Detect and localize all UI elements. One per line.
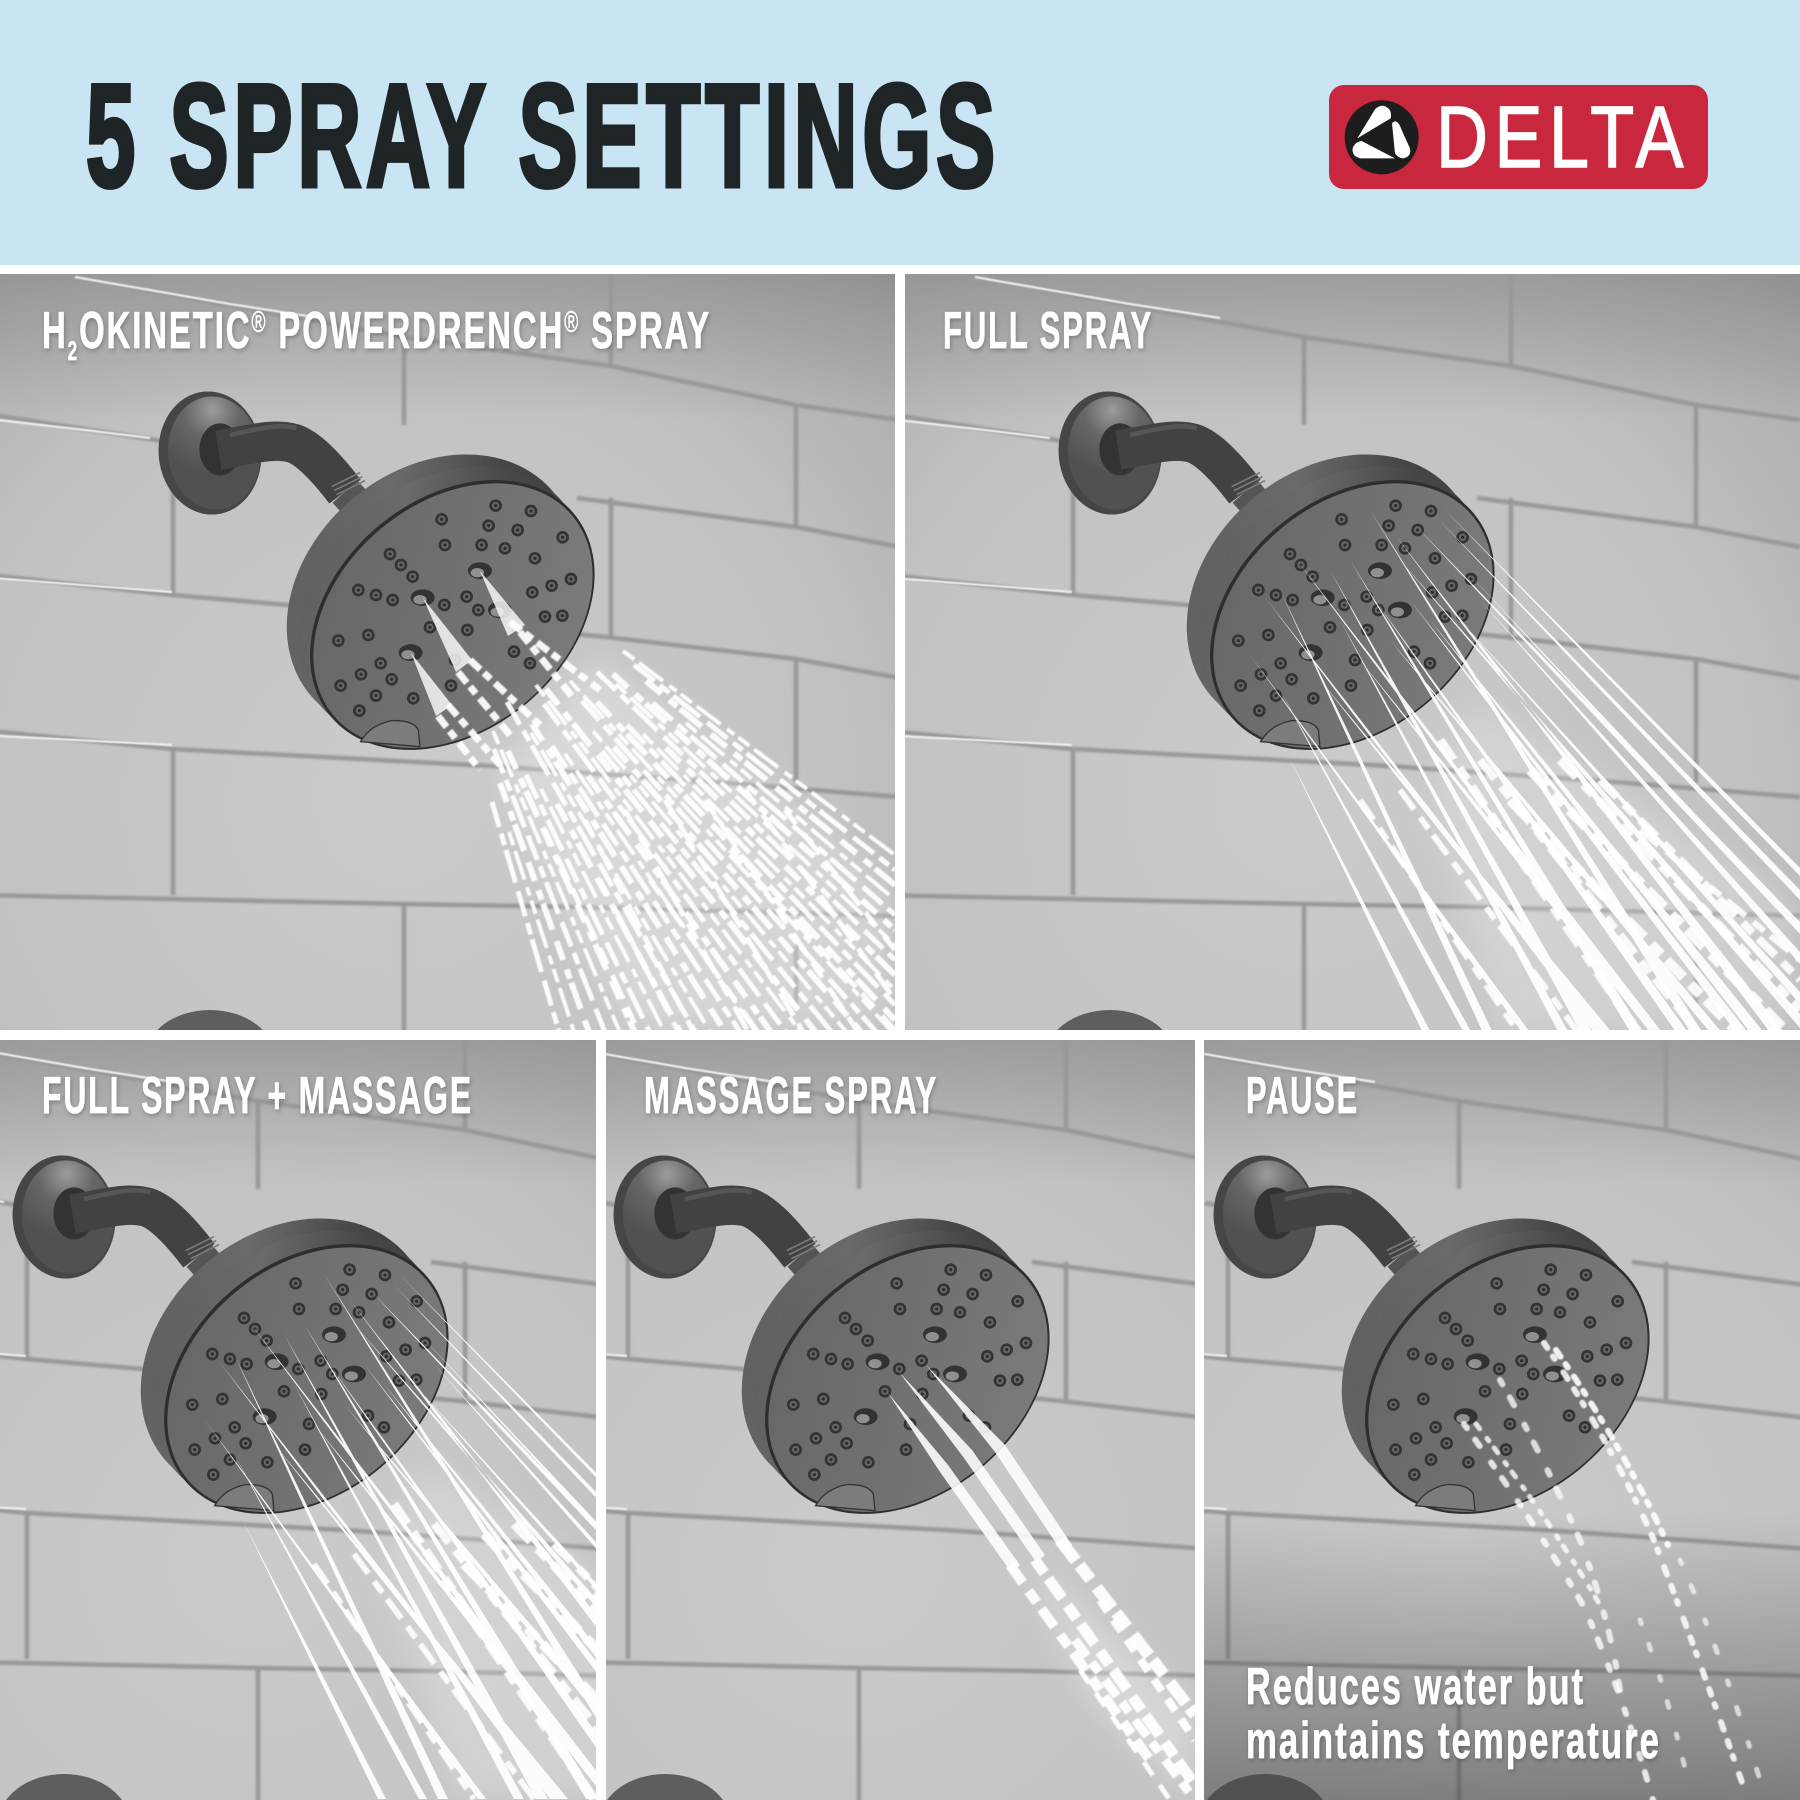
water: full spray streams (1250, 510, 1800, 1035)
label: ® (564, 306, 580, 339)
label: FULL SPRAY + MASSAGE (42, 1067, 473, 1125)
label: SPRAY (580, 302, 711, 360)
water: massage streams (888, 1365, 1195, 1800)
label: PAUSE (1246, 1067, 1359, 1125)
description text (1246, 1658, 1661, 1770)
panel: massage spray (606, 1040, 1195, 1800)
bottom shade (1204, 1542, 1800, 1800)
panel: H2Okinetic PowerDrench spray (0, 274, 895, 1030)
water: drench spray (411, 571, 895, 1035)
label: H (42, 302, 83, 360)
label: POWERDRENCH (267, 302, 564, 360)
label: ® (251, 306, 267, 339)
water: reduced droplets (1464, 1343, 1760, 1800)
icon: Delta triangle mark (1345, 100, 1419, 174)
title: 5 SPRAY SETTINGS (86, 54, 1000, 217)
label: MASSAGE SPRAY (644, 1067, 938, 1125)
header band (0, 0, 1800, 265)
wordmark: DELTA (1436, 89, 1690, 186)
label: OKINETIC (79, 302, 251, 360)
label: FULL SPRAY (943, 302, 1153, 360)
panel: full spray (905, 274, 1800, 1030)
Delta logo (1329, 85, 1708, 189)
water: full spray + massage streams (205, 1276, 596, 1800)
description text: Reduces water but (1246, 1658, 1585, 1716)
label: 2 (68, 336, 79, 366)
panel: full spray + massage (0, 1040, 596, 1800)
panel: pause (1204, 1040, 1800, 1800)
